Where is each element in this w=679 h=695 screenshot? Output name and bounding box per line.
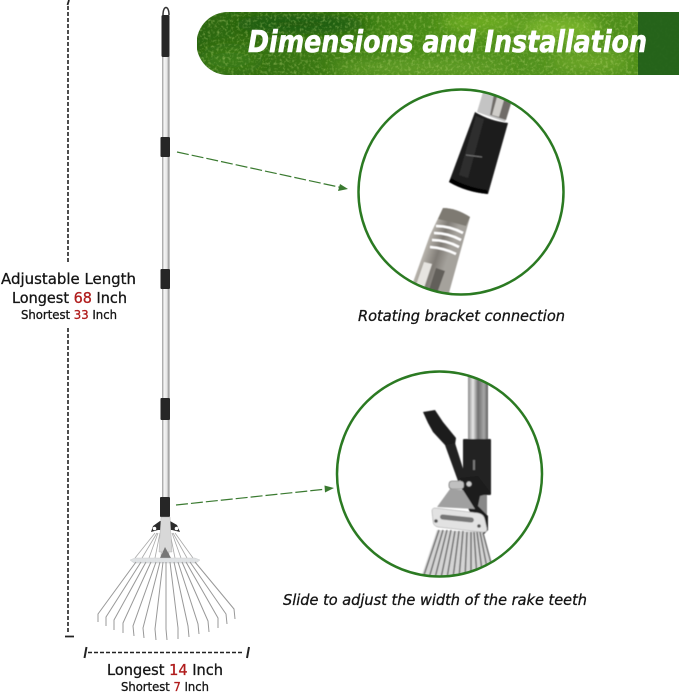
label: adjustable length: Shortest 33 Inch [21, 308, 117, 322]
crossbar [130, 558, 200, 563]
panel: slide adjust detail [337, 372, 542, 578]
black sleeve [463, 439, 491, 495]
label: adjustable length: Adjustable Length [1, 270, 136, 288]
arrow: collar to rotating connection [177, 152, 348, 191]
panel: rotating bracket detail [358, 90, 564, 300]
threaded connector [413, 208, 470, 292]
black grip and collars [160, 15, 170, 517]
title banner [197, 12, 679, 75]
ring [337, 372, 542, 576]
lower tines [98, 562, 235, 640]
label: rake width: Longest 14 Inch [107, 661, 223, 679]
width dimension line [84, 647, 249, 658]
length dimension line [65, 0, 74, 636]
tines [422, 530, 490, 576]
icon: hanging loop [163, 8, 169, 15]
rake head bracket [151, 521, 180, 532]
telescopic pole [162, 15, 170, 515]
caption: slide adjust: Slide to adjust the width of the rake teeth [283, 591, 587, 609]
clamp plate [432, 508, 487, 532]
upper tube [476, 93, 506, 123]
neck plate [437, 489, 475, 509]
steel pole [468, 372, 488, 442]
upper tines [135, 533, 193, 558]
bracket arm [460, 476, 491, 534]
label: rake width [107, 661, 223, 694]
pivot [449, 481, 464, 489]
black sleeve [449, 112, 508, 194]
caption: rotating bracket: Rotating bracket connection [358, 307, 565, 325]
label: adjustable length [1, 270, 136, 322]
label: adjustable length: Longest 68 Inch [12, 289, 127, 307]
arrow: rake head to slide detail [176, 486, 334, 505]
label: rake width: Shortest 7 Inch [121, 680, 209, 694]
rake illustration [98, 8, 235, 640]
lever handle [423, 410, 456, 445]
ring [358, 90, 564, 294]
